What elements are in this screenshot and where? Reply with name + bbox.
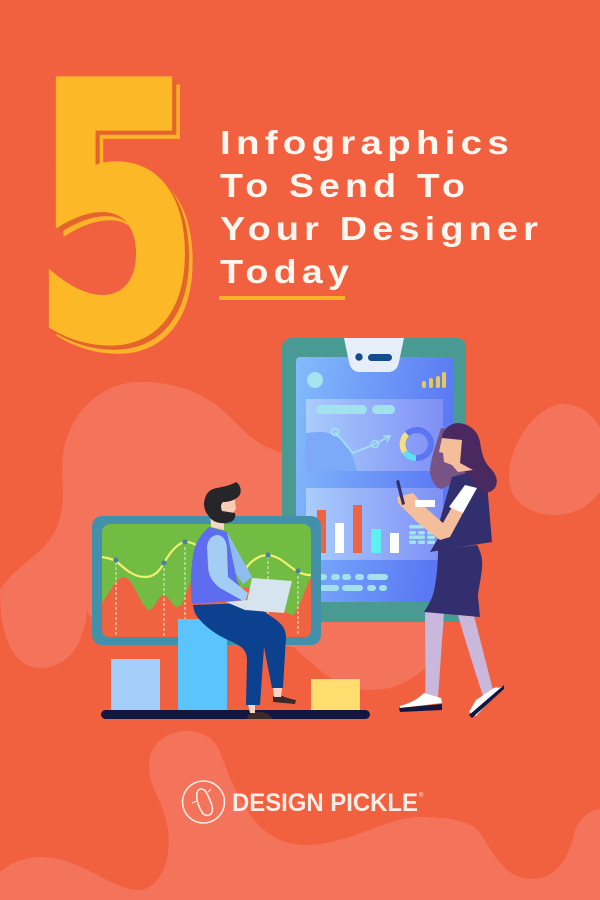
phone dashboard (282, 338, 466, 622)
big number 5: 5 (40, 16, 208, 430)
chart background (102, 524, 311, 637)
title: Infographics (220, 124, 514, 161)
top (430, 472, 492, 552)
shoes (273, 696, 296, 704)
back hair (430, 428, 466, 489)
title: To Send To (220, 167, 470, 204)
background blob: bottom (0, 731, 600, 900)
ankles (273, 688, 282, 697)
signal bars (422, 372, 446, 388)
area chart (102, 577, 311, 637)
big number 5: 5 (36, 12, 204, 426)
trend arrow (332, 428, 390, 453)
man with laptop (191, 482, 296, 719)
hair (442, 423, 497, 492)
donut chart (403, 430, 431, 458)
logo wordmark: DESIGN PICKLE (232, 789, 418, 817)
arm (207, 535, 248, 602)
skirt (424, 545, 482, 617)
laptop (226, 578, 292, 613)
shoes (399, 685, 504, 718)
phone screen (296, 357, 453, 602)
cloud shape (306, 432, 357, 471)
title: Your Designer (220, 210, 543, 247)
background blob: centre (0, 382, 470, 690)
bar chart (317, 505, 399, 553)
vest (191, 527, 246, 604)
block: blue (178, 619, 227, 710)
phone body (282, 338, 466, 622)
woman with phone (396, 423, 504, 718)
background blob: right (509, 404, 600, 515)
lower panel (306, 488, 443, 560)
title (220, 124, 543, 290)
title: Today (220, 253, 354, 290)
trend line (102, 542, 311, 577)
bottom pills (318, 574, 388, 591)
logo icon (182, 781, 224, 823)
face (220, 494, 236, 513)
status dot (307, 372, 323, 388)
legend lines (409, 525, 435, 544)
logo (182, 781, 424, 823)
hair and beard (204, 482, 241, 523)
top panel (306, 399, 443, 471)
sleeve (449, 485, 477, 513)
block: yellow (311, 679, 360, 710)
dashed guides (116, 542, 298, 636)
monitor frame (92, 516, 321, 645)
data points (113, 539, 301, 574)
title underline (219, 296, 345, 300)
neck (210, 512, 224, 530)
registered mark: ® (419, 792, 424, 799)
monitor chart (92, 516, 321, 645)
legs (425, 612, 444, 698)
far arm (226, 532, 252, 584)
handheld phone (396, 480, 405, 505)
phone notch (344, 338, 404, 372)
block: light blue (111, 659, 160, 710)
legs (193, 603, 286, 705)
floor bar (101, 710, 370, 719)
held card (415, 500, 435, 507)
face (439, 438, 473, 472)
forearm (397, 493, 463, 540)
big number 5: 5 (32, 8, 200, 422)
panel pills (316, 405, 395, 414)
